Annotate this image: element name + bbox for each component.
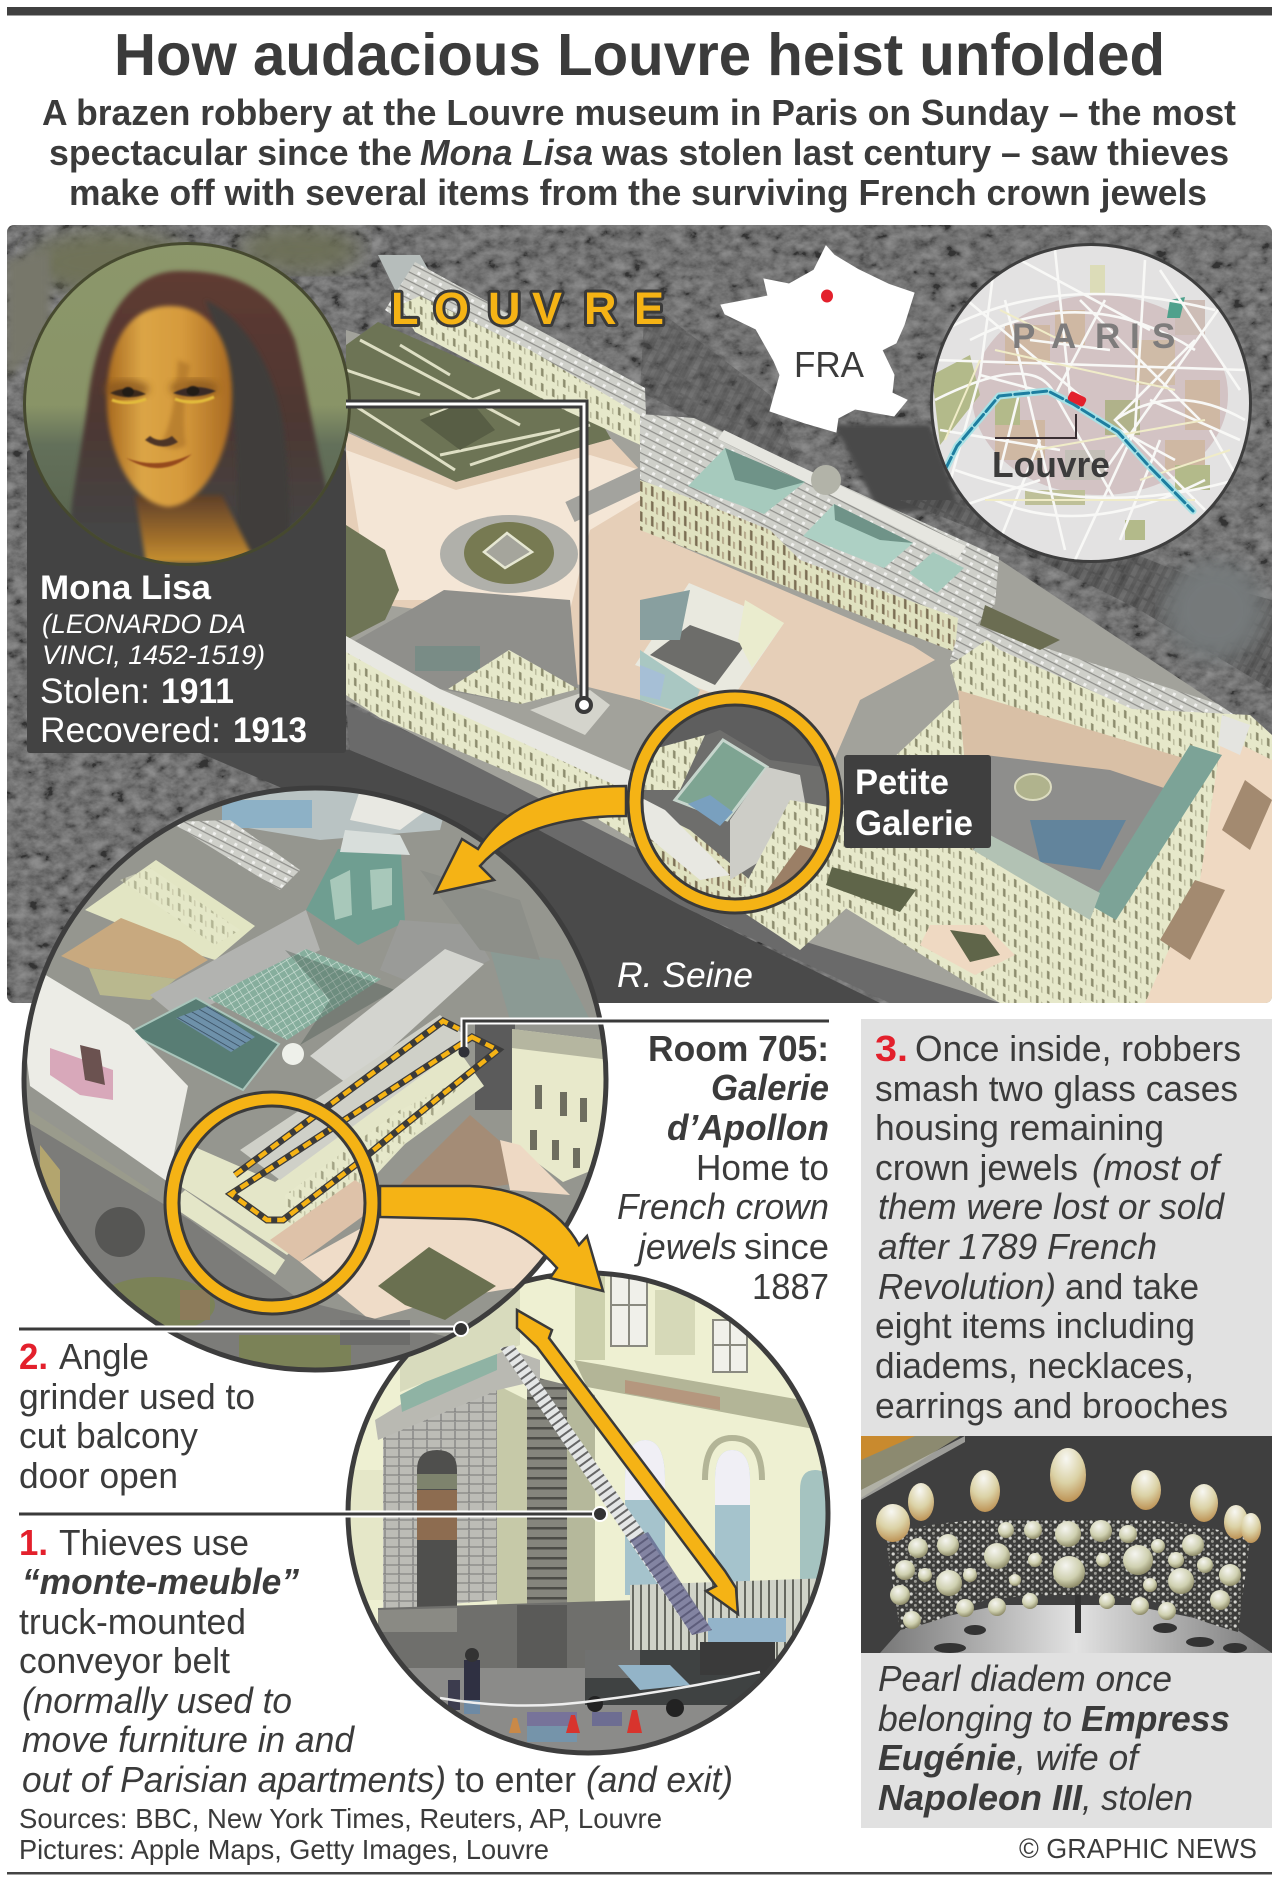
- text block: step 2: 2.: [19, 1336, 48, 1377]
- ring: Petite Galerie highlight: [635, 698, 835, 906]
- Mona Lisa caption: (LEONARDO DA: [42, 609, 246, 639]
- south wing: [346, 636, 850, 950]
- text block: Room 705: [617, 1028, 829, 1307]
- text block: diadem caption: Empress: [1081, 1698, 1230, 1739]
- river Seine on map: [945, 391, 1193, 511]
- jewelled frame: [885, 1519, 1250, 1632]
- Richelieu block: [640, 414, 999, 652]
- subtitle: [42, 92, 1236, 213]
- teal tower roof: [306, 830, 410, 945]
- nose side shading: [160, 360, 190, 449]
- panel: gray text box background: [861, 1019, 1272, 1828]
- blue-green pavilion roof: [129, 998, 279, 1090]
- dashed route of Room 705: [231, 1021, 498, 1220]
- text block: Room 705: French crown: [617, 1186, 829, 1227]
- arrow: curved from Petite Galerie: [435, 786, 626, 893]
- top rule: [7, 7, 1272, 16]
- west building facade: [61, 860, 255, 1000]
- top glazed roof: [170, 790, 450, 890]
- text block: Room 705: Home to: [696, 1147, 829, 1188]
- map label: Louvre: Louvre: [992, 444, 1110, 485]
- panel: aerial view of the Louvre: [7, 225, 1272, 1003]
- long roof: [310, 949, 484, 1086]
- map: Paris locator: [930, 240, 1270, 570]
- right pavilion: [512, 1029, 610, 1182]
- upper windows: [575, 1270, 747, 1372]
- truck: [585, 1618, 786, 1717]
- teal grid courtyard: [208, 949, 381, 1040]
- callout line: step 2: [19, 1322, 468, 1336]
- text block: step 1: move furniture in and: [22, 1719, 355, 1760]
- label: LOUVRE: V: [532, 283, 562, 334]
- cornice: [574, 1360, 810, 1428]
- sources: Pictures: Apple Maps, Getty Images, Louvre: [19, 1834, 549, 1865]
- label: LOUVRE: R: [584, 283, 616, 334]
- text block: Room 705: Room 705:: [648, 1028, 829, 1069]
- label: LOUVRE: E: [634, 283, 664, 334]
- Mona Lisa caption: VINCI, 1452-1519): [42, 640, 265, 670]
- text block: Room 705: 1887: [752, 1266, 829, 1307]
- round pearls: [890, 1520, 1241, 1629]
- subtitle: was stolen last century – saw thieves: [601, 132, 1229, 173]
- subtitle: make off with several items from the surviving French crown jewels: [69, 172, 1207, 213]
- gardens: [346, 322, 611, 482]
- map label: PARIS: R: [1095, 317, 1120, 356]
- white building with billboard: [27, 975, 188, 1180]
- text block: Room 705: since: [744, 1226, 829, 1267]
- road and trees: [24, 1120, 460, 1380]
- callout line: Room 705: [458, 1021, 829, 1058]
- Cour Carree block: [800, 690, 1272, 1003]
- circle: conveyor belt photograph: [340, 1270, 840, 1760]
- river Seine: [200, 750, 880, 1003]
- text block: step 1: to enter: [455, 1759, 576, 1800]
- display stand: [880, 1605, 1272, 1653]
- Carrousel roundabout: [440, 476, 647, 593]
- label: Petite Galerie: Galerie: [855, 804, 973, 843]
- text block: step 3: smash two glass cases: [875, 1068, 1238, 1109]
- text block: step 1: truck-mounted: [19, 1601, 246, 1642]
- map label: PARIS: P: [1012, 317, 1035, 356]
- text block: step 1: [19, 1522, 733, 1800]
- Mona Lisa caption: [40, 569, 307, 750]
- plinth: [378, 1600, 630, 1668]
- ring: Galerie d'Apollon highlight: [172, 1099, 372, 1307]
- text block: step 1: “monte-meuble”: [22, 1561, 299, 1602]
- hair: [70, 271, 335, 570]
- Louvre site ground: [346, 330, 1272, 1003]
- text block: step 2: Angle: [59, 1336, 149, 1377]
- label: Petite Galerie: Petite: [855, 763, 949, 802]
- text block: step 3: eight items including: [875, 1305, 1195, 1346]
- text block: step 3: after 1789 French: [878, 1226, 1157, 1267]
- text block: Room 705: jewels: [633, 1226, 737, 1267]
- label: R. Seine: R. Seine: [617, 956, 753, 995]
- drop pearls: [876, 1448, 1261, 1543]
- iron fence: [630, 1578, 816, 1659]
- sources: [19, 1803, 662, 1865]
- label: LOUVRE: U: [488, 283, 520, 334]
- map: France locator: [721, 246, 914, 432]
- traffic cones: [509, 1710, 642, 1733]
- label: LOUVRE: [391, 283, 664, 334]
- text block: diadem caption: [878, 1658, 1230, 1818]
- map label: PARIS: S: [1152, 317, 1175, 356]
- text block: step 3: crown jewels: [875, 1147, 1078, 1188]
- text block: step 3: [875, 1028, 1241, 1426]
- text block: Room 705: d’Apollon: [667, 1107, 829, 1148]
- map label: PARIS: [1012, 317, 1175, 356]
- Mona Lisa caption: 1911: [161, 672, 234, 711]
- text block: step 3: Once inside, robbers: [915, 1028, 1241, 1069]
- gray plaza: [346, 590, 578, 704]
- text block: step 2: door open: [19, 1455, 178, 1496]
- east half of north wing: [950, 605, 1234, 714]
- map: France locator: FRA: [794, 344, 864, 385]
- text block: diadem caption: Napoleon III: [878, 1777, 1083, 1818]
- label: Petite Galerie: [844, 755, 991, 848]
- text block: diadem caption: Eugénie: [878, 1737, 1016, 1778]
- text block: diadem caption: , wife of: [1016, 1737, 1142, 1778]
- eye sockets: [105, 379, 218, 398]
- text block: step 3: 3.: [875, 1028, 908, 1069]
- map blocks: [932, 265, 1220, 540]
- callout line: Mona Lisa location: [346, 404, 591, 712]
- bystanders: [448, 1648, 480, 1714]
- label: LOUVRE: O: [434, 283, 469, 334]
- text block: step 1: out of Parisian apartments): [22, 1759, 446, 1800]
- stone corner tower: [347, 1290, 595, 1610]
- Cour Napoleon courtyard: [346, 432, 935, 770]
- map label: PARIS: A: [1051, 317, 1076, 356]
- Pyramid: [635, 583, 784, 715]
- mouth: [126, 454, 192, 468]
- west wing: [378, 255, 647, 448]
- label: LOUVRE: L: [391, 283, 418, 334]
- callout line: step 1: [19, 1507, 607, 1521]
- text block: step 3: earrings and brooches: [875, 1385, 1228, 1426]
- text block: step 2: cut balcony: [19, 1415, 198, 1456]
- neck: [135, 495, 256, 563]
- photo: pearl diadem: [861, 1436, 1272, 1653]
- green lawn: [378, 1247, 496, 1320]
- right wing gap: [475, 1020, 515, 1110]
- gray roofs: [150, 910, 320, 1020]
- subtitle: Mona Lisa: [420, 132, 593, 173]
- text block: step 3: housing remaining: [875, 1107, 1164, 1148]
- text block: step 1: conveyor belt: [19, 1640, 230, 1681]
- credit: © GRAPHIC NEWS: [1019, 1833, 1257, 1864]
- Mona Lisa caption: Mona Lisa: [40, 569, 212, 607]
- map callout line: [995, 414, 1076, 438]
- subtitle: A brazen robbery at the Louvre museum in Paris on Sunday – the most: [42, 92, 1236, 133]
- map roads: [935, 250, 1250, 560]
- title: How audacious Louvre heist unfolded: [114, 22, 1165, 88]
- panel: Mona Lisa: [20, 240, 360, 753]
- text block: diadem caption: , stolen: [1082, 1777, 1193, 1818]
- surrounding city blocks: [7, 228, 1272, 690]
- sources: Sources: BBC, New York Times, Reuters, AP, Louvre: [19, 1803, 662, 1834]
- Mona Lisa caption: Recovered:: [40, 711, 221, 750]
- Mona Lisa caption: Stolen:: [40, 672, 150, 711]
- arrow: curved from Galerie ring to photo: [380, 1186, 603, 1291]
- text block: Room 705: Galerie: [711, 1067, 829, 1108]
- text block: step 2: [19, 1336, 255, 1496]
- south bank quay: [346, 705, 1000, 1003]
- circle: aerial detail of Galerie d'Apollon: [20, 788, 610, 1380]
- text block: step 1: Thieves use: [59, 1522, 249, 1563]
- eyes: [110, 386, 216, 403]
- nose shadow: [145, 436, 178, 447]
- bottom rule: [7, 1872, 1272, 1874]
- text block: step 1: 1.: [19, 1522, 48, 1563]
- text block: step 3: (most of: [1092, 1147, 1223, 1188]
- arrow: double-headed along conveyor: [517, 1310, 738, 1614]
- map label: PARIS: I: [1130, 317, 1140, 356]
- text block: diadem caption: Pearl diadem once: [878, 1658, 1172, 1699]
- text block: step 3: diadems, necklaces,: [875, 1345, 1194, 1386]
- peach and brown court: [270, 1115, 570, 1320]
- text block: diadem caption: belonging to: [878, 1698, 1072, 1739]
- veil and dark hair: [205, 300, 290, 560]
- text block: step 3: Revolution): [878, 1266, 1056, 1307]
- conveyor ladder: [500, 1345, 712, 1635]
- gallery building: [180, 1015, 484, 1255]
- text block: step 2: grinder used to: [19, 1376, 255, 1417]
- text block: step 3: them were lost or sold: [878, 1186, 1225, 1227]
- street and barrier: [408, 1668, 728, 1750]
- text block: step 3: and take: [1065, 1266, 1199, 1307]
- map marker: Louvre: [1067, 390, 1087, 408]
- arched windows: [625, 1438, 830, 1595]
- face: [107, 306, 232, 507]
- Mona Lisa caption: 1913: [233, 711, 307, 750]
- text block: step 1: (and exit): [586, 1759, 733, 1800]
- Petite Galerie building: [644, 706, 826, 898]
- subtitle: spectacular since the: [49, 132, 412, 173]
- text block: step 1: (normally used to: [22, 1680, 292, 1721]
